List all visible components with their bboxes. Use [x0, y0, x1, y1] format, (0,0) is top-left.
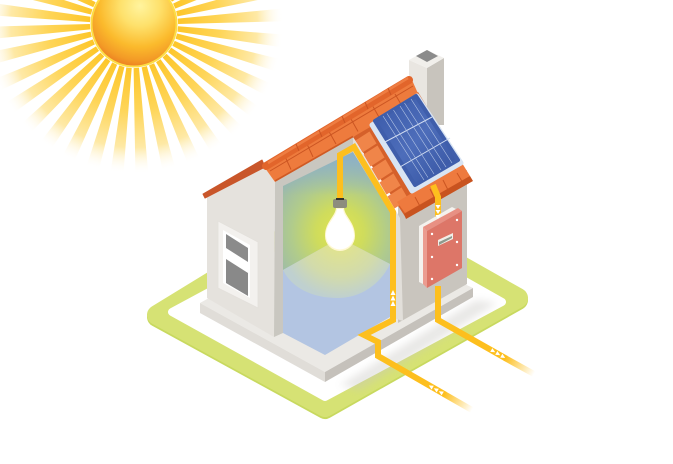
wire: house circuit	[340, 147, 472, 410]
ground plot	[157, 200, 518, 409]
bulb socket	[333, 198, 347, 208]
window	[218, 221, 258, 308]
sun with rays	[0, 0, 286, 176]
roof front tile band	[265, 78, 420, 182]
room floor	[283, 238, 390, 355]
base plinth	[200, 225, 473, 382]
chimney	[409, 50, 444, 125]
chimney opening	[416, 50, 438, 62]
ridge tiles	[266, 78, 413, 171]
panel cells	[375, 96, 458, 185]
cut wall section left	[274, 137, 353, 337]
bulb glass	[325, 208, 355, 251]
house shadow on ground	[340, 300, 497, 390]
light pool on floor	[283, 238, 390, 298]
panel frame	[372, 96, 461, 191]
left column tiles	[356, 132, 408, 208]
ground shape: green lawn border	[157, 200, 518, 407]
gable strip	[203, 160, 265, 198]
sun disc	[90, 0, 178, 68]
meter slot	[438, 233, 453, 246]
electric meter box	[419, 207, 462, 288]
arrows on wires	[390, 205, 505, 395]
wire: meter down to ground	[438, 286, 534, 374]
tile separators	[285, 94, 402, 170]
left wall	[207, 167, 275, 337]
lower roof edge	[275, 136, 353, 181]
sun rays	[0, 0, 286, 176]
ground shape: white inner path	[172, 216, 502, 397]
house	[200, 50, 534, 410]
cut wall section right	[353, 137, 403, 321]
window pane upper	[226, 234, 248, 262]
window pane lower	[226, 259, 248, 296]
wire: panel to meter	[433, 185, 438, 222]
roof right slope	[353, 92, 473, 219]
right wall	[398, 170, 467, 323]
solar panel	[372, 96, 461, 191]
light bulb	[325, 198, 355, 251]
meter screws	[431, 219, 458, 280]
lawn lower edge shade	[157, 202, 518, 409]
bottom tile row	[397, 163, 470, 213]
back room wall	[283, 150, 390, 272]
